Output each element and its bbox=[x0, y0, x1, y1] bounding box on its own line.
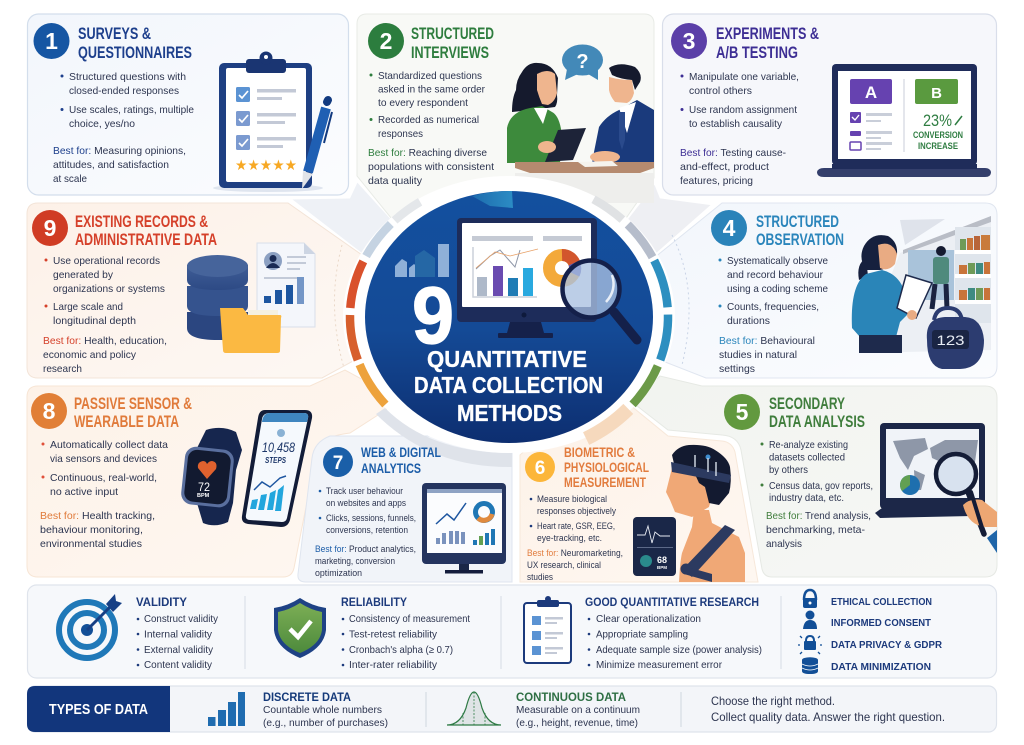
text block 9: organizations or systems bbox=[53, 283, 165, 295]
validity list: External validity bbox=[144, 645, 214, 656]
text block 5: Re-analyze existing bbox=[769, 439, 848, 451]
good research list: Clear operationalization bbox=[596, 614, 701, 625]
validity list: Content validity bbox=[144, 660, 213, 671]
text block 1: Best for: Measuring opinions, bbox=[53, 145, 186, 157]
text block 2: Recorded as numerical bbox=[378, 114, 479, 126]
good research list: Adequate sample size (power analysis) bbox=[596, 645, 762, 656]
ethics labels: DATA MINIMIZATION bbox=[831, 662, 931, 673]
number badge 8: 8 bbox=[43, 398, 56, 424]
continuous data text: CONTINUOUS DATA bbox=[516, 692, 626, 704]
text block 2: asked in the same order bbox=[378, 84, 485, 96]
title text: METHODS bbox=[457, 400, 562, 426]
illustration: laptop with A/B test: 23% bbox=[923, 111, 952, 130]
number badge 1 bbox=[34, 23, 70, 59]
ethics labels: INFORMED CONSENT bbox=[831, 618, 931, 629]
wedge backgrounds between cards bbox=[288, 180, 714, 258]
illustration: man wearing EEG headband and chest sensor: 68 bbox=[657, 555, 667, 565]
heading 1: QUESTIONNAIRES bbox=[78, 44, 192, 62]
heading 7: WEB & DIGITAL bbox=[361, 444, 441, 460]
ethics labels bbox=[831, 597, 943, 673]
text block 5: by others bbox=[769, 464, 808, 476]
text block 4: using a coding scheme bbox=[727, 283, 828, 295]
validity list bbox=[136, 597, 219, 671]
illustration: man wearing EEG headband and chest sensor: BPM bbox=[657, 565, 667, 570]
text block 1 bbox=[53, 71, 194, 185]
reliability list bbox=[341, 597, 470, 671]
title text: DATA COLLECTION bbox=[414, 372, 603, 398]
icon: target with arrow bbox=[59, 594, 122, 658]
text block 9: Large scale and bbox=[53, 301, 123, 313]
heading 6: PHYSIOLOGICAL bbox=[564, 459, 649, 475]
ethics labels: DATA PRIVACY & GDPR bbox=[831, 640, 943, 651]
continuous data text: (e.g., height, revenue, time) bbox=[516, 718, 638, 729]
text block 5 bbox=[760, 439, 873, 550]
text block 1: closed-ended responses bbox=[69, 85, 179, 97]
text block 9: economic and policy bbox=[43, 349, 137, 361]
text block 2: to every respondent bbox=[378, 97, 468, 109]
number badge 9: 9 bbox=[44, 215, 56, 241]
panel: 6 biometric and physiological measurement bbox=[520, 405, 758, 582]
reliability list: Test-retest reliability bbox=[349, 630, 438, 640]
text block 6: UX research, clinical bbox=[527, 560, 601, 570]
text block 2: responses bbox=[378, 128, 423, 140]
icon: lock bbox=[803, 590, 817, 608]
number badge 5 bbox=[724, 394, 760, 430]
icon: shield with check bbox=[274, 598, 326, 658]
closing message bbox=[711, 694, 945, 724]
closing message: Collect quality data. Answer the right question. bbox=[711, 710, 945, 724]
good research list: Appropriate sampling bbox=[596, 630, 688, 640]
text block 9: Best for: Health, education, bbox=[43, 335, 167, 347]
number badge 3 bbox=[671, 23, 707, 59]
heading 6: MEASUREMENT bbox=[564, 474, 646, 490]
icon: database bbox=[802, 657, 818, 674]
text block 8: Automatically collect data bbox=[50, 439, 168, 451]
text block 2: Best for: Reaching diverse bbox=[368, 147, 487, 159]
number badge 6: 6 bbox=[535, 458, 545, 479]
panel: 5 secondary data analysis bbox=[632, 376, 997, 577]
illustration: smartwatch showing 72 BPM: BPM bbox=[197, 493, 210, 499]
panel: 3 experiments and A/B testing bbox=[662, 14, 996, 195]
illustration: smartwatch showing 72 BPM bbox=[180, 428, 242, 525]
text block 9: generated by bbox=[53, 269, 114, 281]
text block 9: research bbox=[43, 363, 82, 375]
heading 1: SURVEYS & bbox=[78, 25, 151, 43]
heading 8 bbox=[74, 395, 192, 431]
text block 7: marketing, conversion bbox=[315, 556, 395, 566]
heading 4: STRUCTURED bbox=[756, 213, 839, 231]
text block 7: Track user behaviour bbox=[326, 486, 403, 496]
illustration: database, document, folder bbox=[187, 243, 315, 353]
text block 6: studies bbox=[527, 572, 554, 582]
icon: person bbox=[803, 610, 817, 629]
text block 1: Structured questions with bbox=[69, 71, 186, 83]
text block 5: industry data, etc. bbox=[769, 492, 844, 504]
icon: clipboard with checklist and pen bbox=[213, 52, 332, 192]
text block 5: Census data, gov reports, bbox=[769, 480, 873, 492]
text block 7: on websites and apps bbox=[326, 498, 407, 508]
heading 5 bbox=[769, 395, 865, 431]
heading 6 bbox=[564, 444, 649, 490]
heading 2: INTERVIEWS bbox=[411, 44, 489, 62]
illustration: phone showing 10,458 steps: 10,458 bbox=[262, 439, 295, 455]
text block 8: Best for: Health tracking, bbox=[40, 510, 155, 522]
number badge 6 bbox=[525, 452, 555, 482]
panel: 9 existing records bbox=[27, 203, 400, 378]
text block 4: Systematically observe bbox=[727, 255, 828, 267]
text block 5: benchmarking, meta- bbox=[766, 524, 865, 536]
text block 6: Measure biological bbox=[537, 494, 607, 504]
discrete data text: Countable whole numbers bbox=[263, 705, 382, 716]
band: types of data bbox=[27, 686, 996, 732]
ring segments bbox=[350, 199, 668, 439]
heading 6: BIOMETRIC & bbox=[564, 444, 635, 460]
heading 4: OBSERVATION bbox=[756, 231, 844, 249]
text block 3: Best for: Testing cause- bbox=[680, 147, 786, 159]
text block 3: and-effect, product bbox=[680, 161, 769, 173]
illustration: laptop with A/B test: B bbox=[931, 85, 942, 102]
continuous data text: Measurable on a continuum bbox=[516, 705, 640, 716]
text block 8: behaviour monitoring, bbox=[40, 524, 143, 536]
heading 3: A/B TESTING bbox=[716, 44, 798, 62]
heading 5: SECONDARY bbox=[769, 395, 845, 413]
text block 6: responses objectively bbox=[537, 506, 617, 516]
reliability list: RELIABILITY bbox=[341, 597, 407, 609]
text block 6 bbox=[527, 494, 623, 582]
heading 8: WEARABLE DATA bbox=[74, 413, 179, 431]
panel: 7 web and digital analytics bbox=[298, 408, 512, 582]
number badge 1: 1 bbox=[45, 28, 58, 54]
icon: clipboard checklist bbox=[524, 596, 571, 663]
text block 3: Use random assignment bbox=[689, 104, 797, 116]
heading 3: EXPERIMENTS & bbox=[716, 25, 819, 43]
text block 4 bbox=[718, 255, 828, 375]
panel: 2 structured interviews bbox=[357, 14, 654, 224]
text block 7: optimization bbox=[315, 568, 362, 578]
number badge 2 bbox=[368, 23, 404, 59]
text block 7: Best for: Product analytics, bbox=[315, 544, 416, 554]
types of data label bbox=[27, 686, 170, 732]
illustration: smartwatch showing 72 BPM: 72 bbox=[198, 480, 210, 494]
panel: 8 passive sensor and wearable data bbox=[27, 370, 400, 577]
validity list: Internal validity bbox=[144, 630, 213, 640]
icon: bar chart bbox=[208, 692, 245, 726]
text block 7: Clicks, sessions, funnels, bbox=[326, 513, 416, 523]
number badge 7 bbox=[323, 447, 353, 477]
heading 7 bbox=[361, 444, 441, 476]
good research list: GOOD QUANTITATIVE RESEARCH bbox=[585, 597, 759, 609]
text block 9 bbox=[43, 255, 167, 375]
big number 9: 9 bbox=[412, 271, 454, 361]
discrete data text: DISCRETE DATA bbox=[263, 692, 351, 704]
illustration: observer in a store with counter: 123 bbox=[936, 332, 965, 348]
heading 8: PASSIVE SENSOR & bbox=[74, 395, 192, 413]
text block 4: Best for: Behavioural bbox=[719, 335, 815, 347]
heading 3 bbox=[716, 25, 819, 62]
illustration: analytics dashboard monitor bbox=[422, 483, 506, 574]
icon: bell curve bbox=[447, 692, 501, 725]
text block 9: longitudinal depth bbox=[53, 315, 136, 327]
band: research quality summary bbox=[28, 585, 996, 678]
illustration: laptop with A/B test: CONVERSION bbox=[913, 130, 963, 140]
discrete data text: (e.g., number of purchases) bbox=[263, 718, 388, 729]
text block 6: Best for: Neuromarketing, bbox=[527, 548, 623, 558]
illustration: laptop with A/B test bbox=[817, 64, 991, 177]
number badge 2: 2 bbox=[380, 28, 392, 54]
text block 9: Use operational records bbox=[53, 255, 160, 267]
text block 8: environmental studies bbox=[40, 538, 142, 550]
good research list bbox=[585, 597, 762, 671]
text block 3: to establish causality bbox=[689, 118, 783, 130]
text block 2: data quality bbox=[368, 175, 423, 187]
text block 3: Manipulate one variable, bbox=[689, 71, 799, 83]
heading 9 bbox=[75, 213, 217, 249]
heading 5: DATA ANALYSIS bbox=[769, 413, 865, 431]
heading 4 bbox=[756, 213, 844, 249]
text block 4: studies in natural bbox=[719, 349, 797, 361]
reliability list: Inter-rater reliability bbox=[349, 660, 438, 671]
text block 6: eye-tracking, etc. bbox=[537, 533, 602, 543]
illustration: two people at an interview bbox=[507, 44, 654, 173]
discrete data text bbox=[263, 692, 388, 729]
text block 5: analysis bbox=[766, 538, 802, 550]
text block 7 bbox=[315, 486, 416, 578]
number badge 9 bbox=[32, 210, 68, 246]
text block 2: populations with consistent bbox=[368, 161, 494, 173]
number badge 8 bbox=[31, 393, 67, 429]
small background chart bbox=[395, 244, 449, 277]
heading 2: STRUCTURED bbox=[411, 25, 494, 43]
text block 4: and record behaviour bbox=[727, 269, 823, 281]
continuous data text bbox=[516, 692, 640, 729]
heading 7: ANALYTICS bbox=[361, 460, 421, 476]
number badge 4 bbox=[711, 210, 747, 246]
text block 3 bbox=[680, 71, 799, 187]
text block 8 bbox=[40, 439, 168, 550]
text block 5: datasets collected bbox=[769, 452, 845, 464]
panel: 1 surveys and questionnaires bbox=[28, 14, 348, 195]
white ring behind centre bbox=[343, 176, 675, 453]
closing message: Choose the right method. bbox=[711, 694, 835, 708]
text block 2: Standardized questions bbox=[378, 70, 482, 82]
illustration: two people at an interview: ? bbox=[576, 51, 589, 73]
heading 1 bbox=[78, 25, 192, 62]
types of data label: TYPES OF DATA bbox=[49, 702, 148, 718]
text block 3: control others bbox=[689, 85, 752, 97]
text block 4: durations bbox=[727, 315, 770, 327]
text block 8: no active input bbox=[50, 486, 118, 498]
text block 2 bbox=[368, 70, 494, 187]
text block 4: settings bbox=[719, 363, 755, 375]
text block 3: features, pricing bbox=[680, 175, 753, 187]
heading 2 bbox=[411, 25, 494, 62]
title text bbox=[414, 346, 603, 426]
text block 1: at scale bbox=[53, 173, 87, 185]
monitor with charts bbox=[457, 218, 597, 338]
text block 1: attitudes, and satisfaction bbox=[53, 159, 169, 171]
number badge 4: 4 bbox=[723, 215, 736, 241]
illustration: laptop with world map and magnifier bbox=[875, 423, 997, 553]
centre circle with title bbox=[365, 191, 653, 443]
illustration: phone showing 10,458 steps: STEPS bbox=[265, 455, 286, 465]
icon: magnifying glass bbox=[562, 260, 637, 340]
reliability list: Consistency of measurement bbox=[349, 614, 470, 625]
text block 7: conversions, retention bbox=[326, 525, 408, 535]
ethics labels: ETHICAL COLLECTION bbox=[831, 597, 932, 608]
validity list: VALIDITY bbox=[136, 597, 187, 609]
icon: privacy lock bbox=[798, 636, 822, 654]
illustration: phone showing 10,458 steps bbox=[242, 410, 312, 527]
heading 9: ADMINISTRATIVE DATA bbox=[75, 231, 217, 249]
text block 6: Heart rate, GSR, EEG, bbox=[537, 521, 615, 531]
reliability list: Cronbach's alpha (≥ 0.7) bbox=[349, 645, 453, 656]
panel: 4 structured observation bbox=[640, 203, 997, 378]
text block 5: Best for: Trend analysis, bbox=[766, 510, 871, 522]
illustration: laptop with A/B test: A bbox=[865, 83, 877, 102]
number badge 3: 3 bbox=[683, 28, 695, 54]
icon: clipboard with checklist and pen: ★★★★★ bbox=[235, 158, 297, 174]
good research list: Minimize measurement error bbox=[596, 660, 723, 671]
heading 9: EXISTING RECORDS & bbox=[75, 213, 208, 231]
number badge 7: 7 bbox=[333, 453, 343, 474]
illustration: observer in a store with counter bbox=[852, 216, 991, 369]
illustration: man wearing EEG headband and chest sensor bbox=[633, 445, 745, 582]
title text: QUANTITATIVE bbox=[427, 346, 587, 372]
text block 1: Use scales, ratings, multiple bbox=[69, 104, 194, 116]
illustration: laptop with A/B test: INCREASE bbox=[918, 141, 958, 151]
number badge 5: 5 bbox=[736, 399, 749, 425]
text block 4: Counts, frequencies, bbox=[727, 301, 819, 313]
validity list: Construct validity bbox=[144, 614, 219, 625]
text block 8: Continuous, real-world, bbox=[50, 472, 157, 484]
text block 8: via sensors and devices bbox=[50, 453, 157, 465]
text block 1: choice, yes/no bbox=[69, 118, 135, 130]
